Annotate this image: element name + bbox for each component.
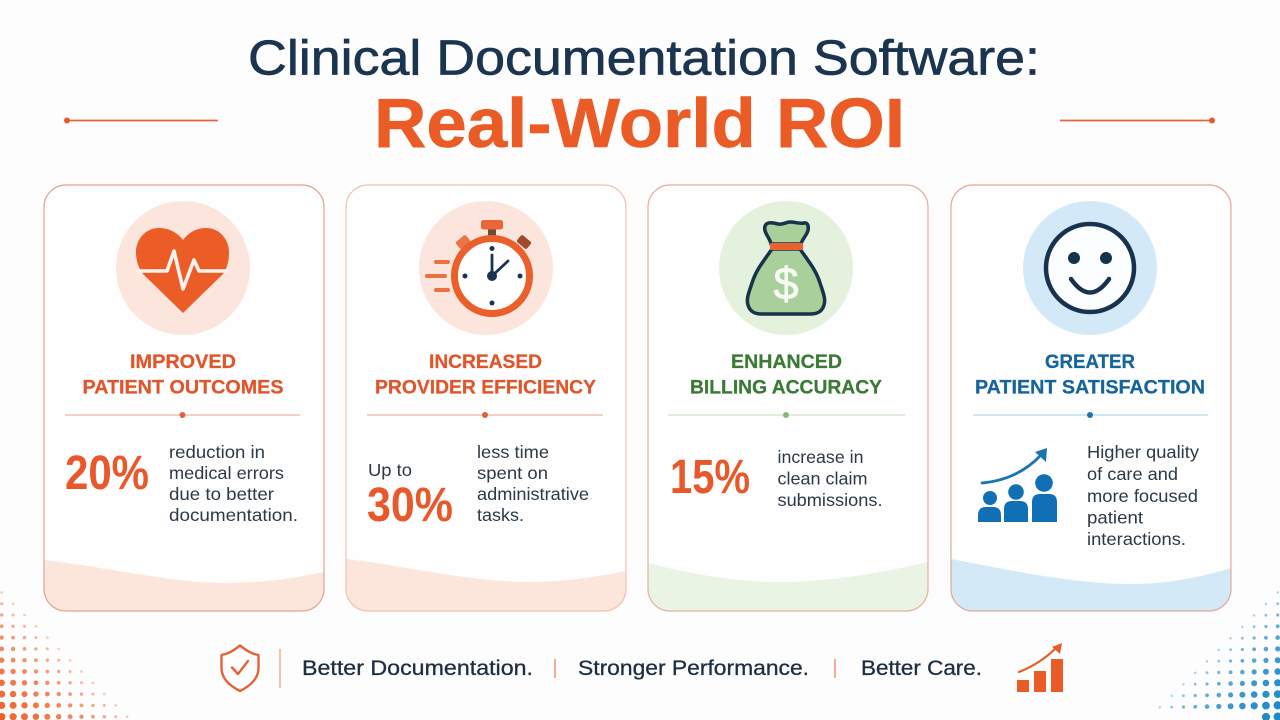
title accent line: right bbox=[1060, 118, 1215, 124]
description: increase in bbox=[778, 447, 864, 467]
heading: PATIENT SATISFACTION bbox=[975, 376, 1205, 398]
icon: money bag: $ bbox=[773, 258, 799, 309]
description: clean claim bbox=[778, 468, 868, 488]
description: administrative bbox=[477, 484, 589, 504]
description bbox=[1087, 442, 1199, 549]
title: Real-World ROI bbox=[374, 84, 905, 162]
description bbox=[778, 447, 882, 510]
description: patient bbox=[1087, 508, 1143, 528]
halftone dots: bottom left bbox=[2, 592, 127, 717]
statistic: up to 30%: Up to bbox=[368, 460, 412, 480]
halftone dots: bottom right bbox=[1150, 592, 1278, 717]
icon: heart with pulse bbox=[136, 228, 229, 313]
footer tagline: Better Documentation. bbox=[302, 657, 533, 680]
description bbox=[169, 442, 298, 525]
description: less time bbox=[477, 442, 549, 462]
description: of care and bbox=[1087, 464, 1178, 484]
statistic: up to 30% bbox=[367, 460, 453, 532]
heading: ENHANCED bbox=[731, 351, 842, 373]
panel: increased provider efficiency bbox=[346, 185, 626, 611]
statistic: 15%: 15% bbox=[670, 451, 750, 504]
statistic: up to 30%: 30% bbox=[367, 479, 453, 532]
heading bbox=[82, 351, 284, 398]
footer tagline: Better Care. bbox=[861, 657, 982, 680]
description: due to better bbox=[169, 484, 274, 504]
footer tagline: Stronger Performance. bbox=[578, 657, 809, 680]
description: tasks. bbox=[477, 505, 524, 525]
panel: greater patient satisfaction bbox=[951, 185, 1231, 611]
icon: rising bar chart bbox=[1017, 643, 1063, 692]
description: reduction in bbox=[169, 442, 265, 462]
heading: GREATER bbox=[1045, 351, 1135, 373]
heading bbox=[375, 351, 596, 398]
description: interactions. bbox=[1087, 529, 1186, 549]
heading bbox=[690, 351, 882, 398]
heading bbox=[975, 351, 1205, 398]
heading: PATIENT OUTCOMES bbox=[82, 376, 284, 398]
statistic: 20%: 20% bbox=[65, 447, 149, 500]
icon: people with rising arrow bbox=[978, 448, 1057, 522]
title accent line: left bbox=[64, 118, 218, 124]
description: Higher quality bbox=[1087, 442, 1199, 462]
footer tagline bbox=[280, 649, 982, 688]
heading: INCREASED bbox=[429, 351, 542, 373]
description: medical errors bbox=[169, 463, 284, 483]
icon: smiley face bbox=[1046, 224, 1134, 312]
title: Clinical Documentation Software: bbox=[248, 32, 1040, 86]
icon: money bag bbox=[747, 222, 825, 314]
title bbox=[248, 32, 1040, 162]
icon: stopwatch bbox=[427, 220, 532, 314]
description: submissions. bbox=[778, 490, 882, 510]
icon: shield with check bbox=[222, 646, 258, 691]
panel: enhanced billing accuracy bbox=[648, 185, 928, 611]
description: spent on bbox=[477, 463, 548, 483]
description: documentation. bbox=[169, 505, 298, 525]
heading: PROVIDER EFFICIENCY bbox=[375, 376, 596, 398]
heading: IMPROVED bbox=[130, 351, 236, 373]
description bbox=[477, 442, 589, 525]
panel: improved patient outcomes bbox=[44, 185, 324, 611]
heading: BILLING ACCURACY bbox=[690, 376, 882, 398]
description: more focused bbox=[1087, 486, 1198, 506]
